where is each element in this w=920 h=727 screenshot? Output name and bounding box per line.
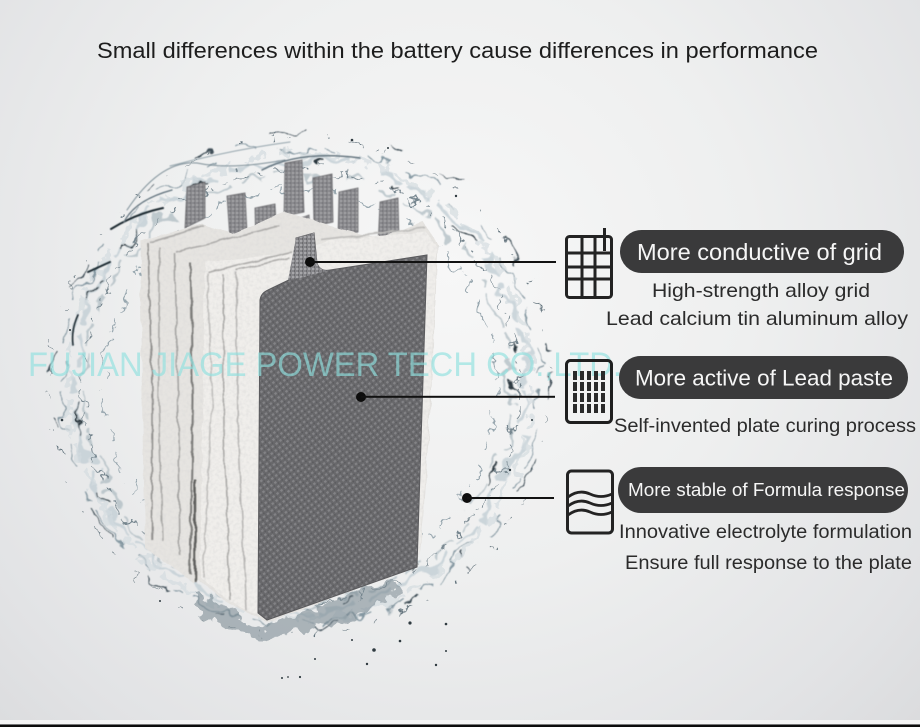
front plate with tab (258, 233, 427, 620)
text: formula description (619, 522, 912, 574)
droplets (61, 139, 533, 679)
tabs behind (185, 160, 399, 252)
leader line: formula (462, 493, 554, 503)
text: grid description: Lead calcium tin aluminum alloy (606, 308, 908, 330)
text: formula description: Ensure full response to the plate (625, 553, 912, 574)
icon: grid (566, 228, 612, 298)
title: Small differences within the battery cause differences in performance (97, 38, 818, 63)
icon: electrolyte (568, 471, 612, 533)
separator folds (148, 226, 425, 610)
pill: more active of lead paste: More active of Lead paste (635, 366, 893, 390)
watermark: FUJIAN JIAGE POWER TECH CO.,LTD. (28, 346, 622, 384)
text: lead paste description: Self-invented plate curing process (614, 416, 916, 437)
pill: more stable of formula response (618, 467, 908, 513)
lower splash mass (195, 580, 400, 638)
water splash ring (50, 134, 550, 679)
separators (140, 212, 438, 622)
icon: lead paste (566, 360, 612, 422)
leader line: grid (305, 257, 556, 267)
battery plate stack (140, 160, 438, 622)
pill: more stable of formula response: More stable of Formula response (628, 480, 905, 500)
leader line: lead paste (356, 392, 555, 402)
text: grid description (606, 280, 908, 330)
pill: more conductive of grid: More conductive of grid (637, 239, 882, 265)
pill: more conductive of grid (620, 230, 904, 273)
pill: more active of lead paste (619, 356, 908, 399)
text: formula description: Innovative electrolyte formulation (619, 522, 912, 543)
dark streaks: upper-left arc (73, 142, 360, 345)
text: grid description: High-strength alloy grid (652, 280, 870, 302)
